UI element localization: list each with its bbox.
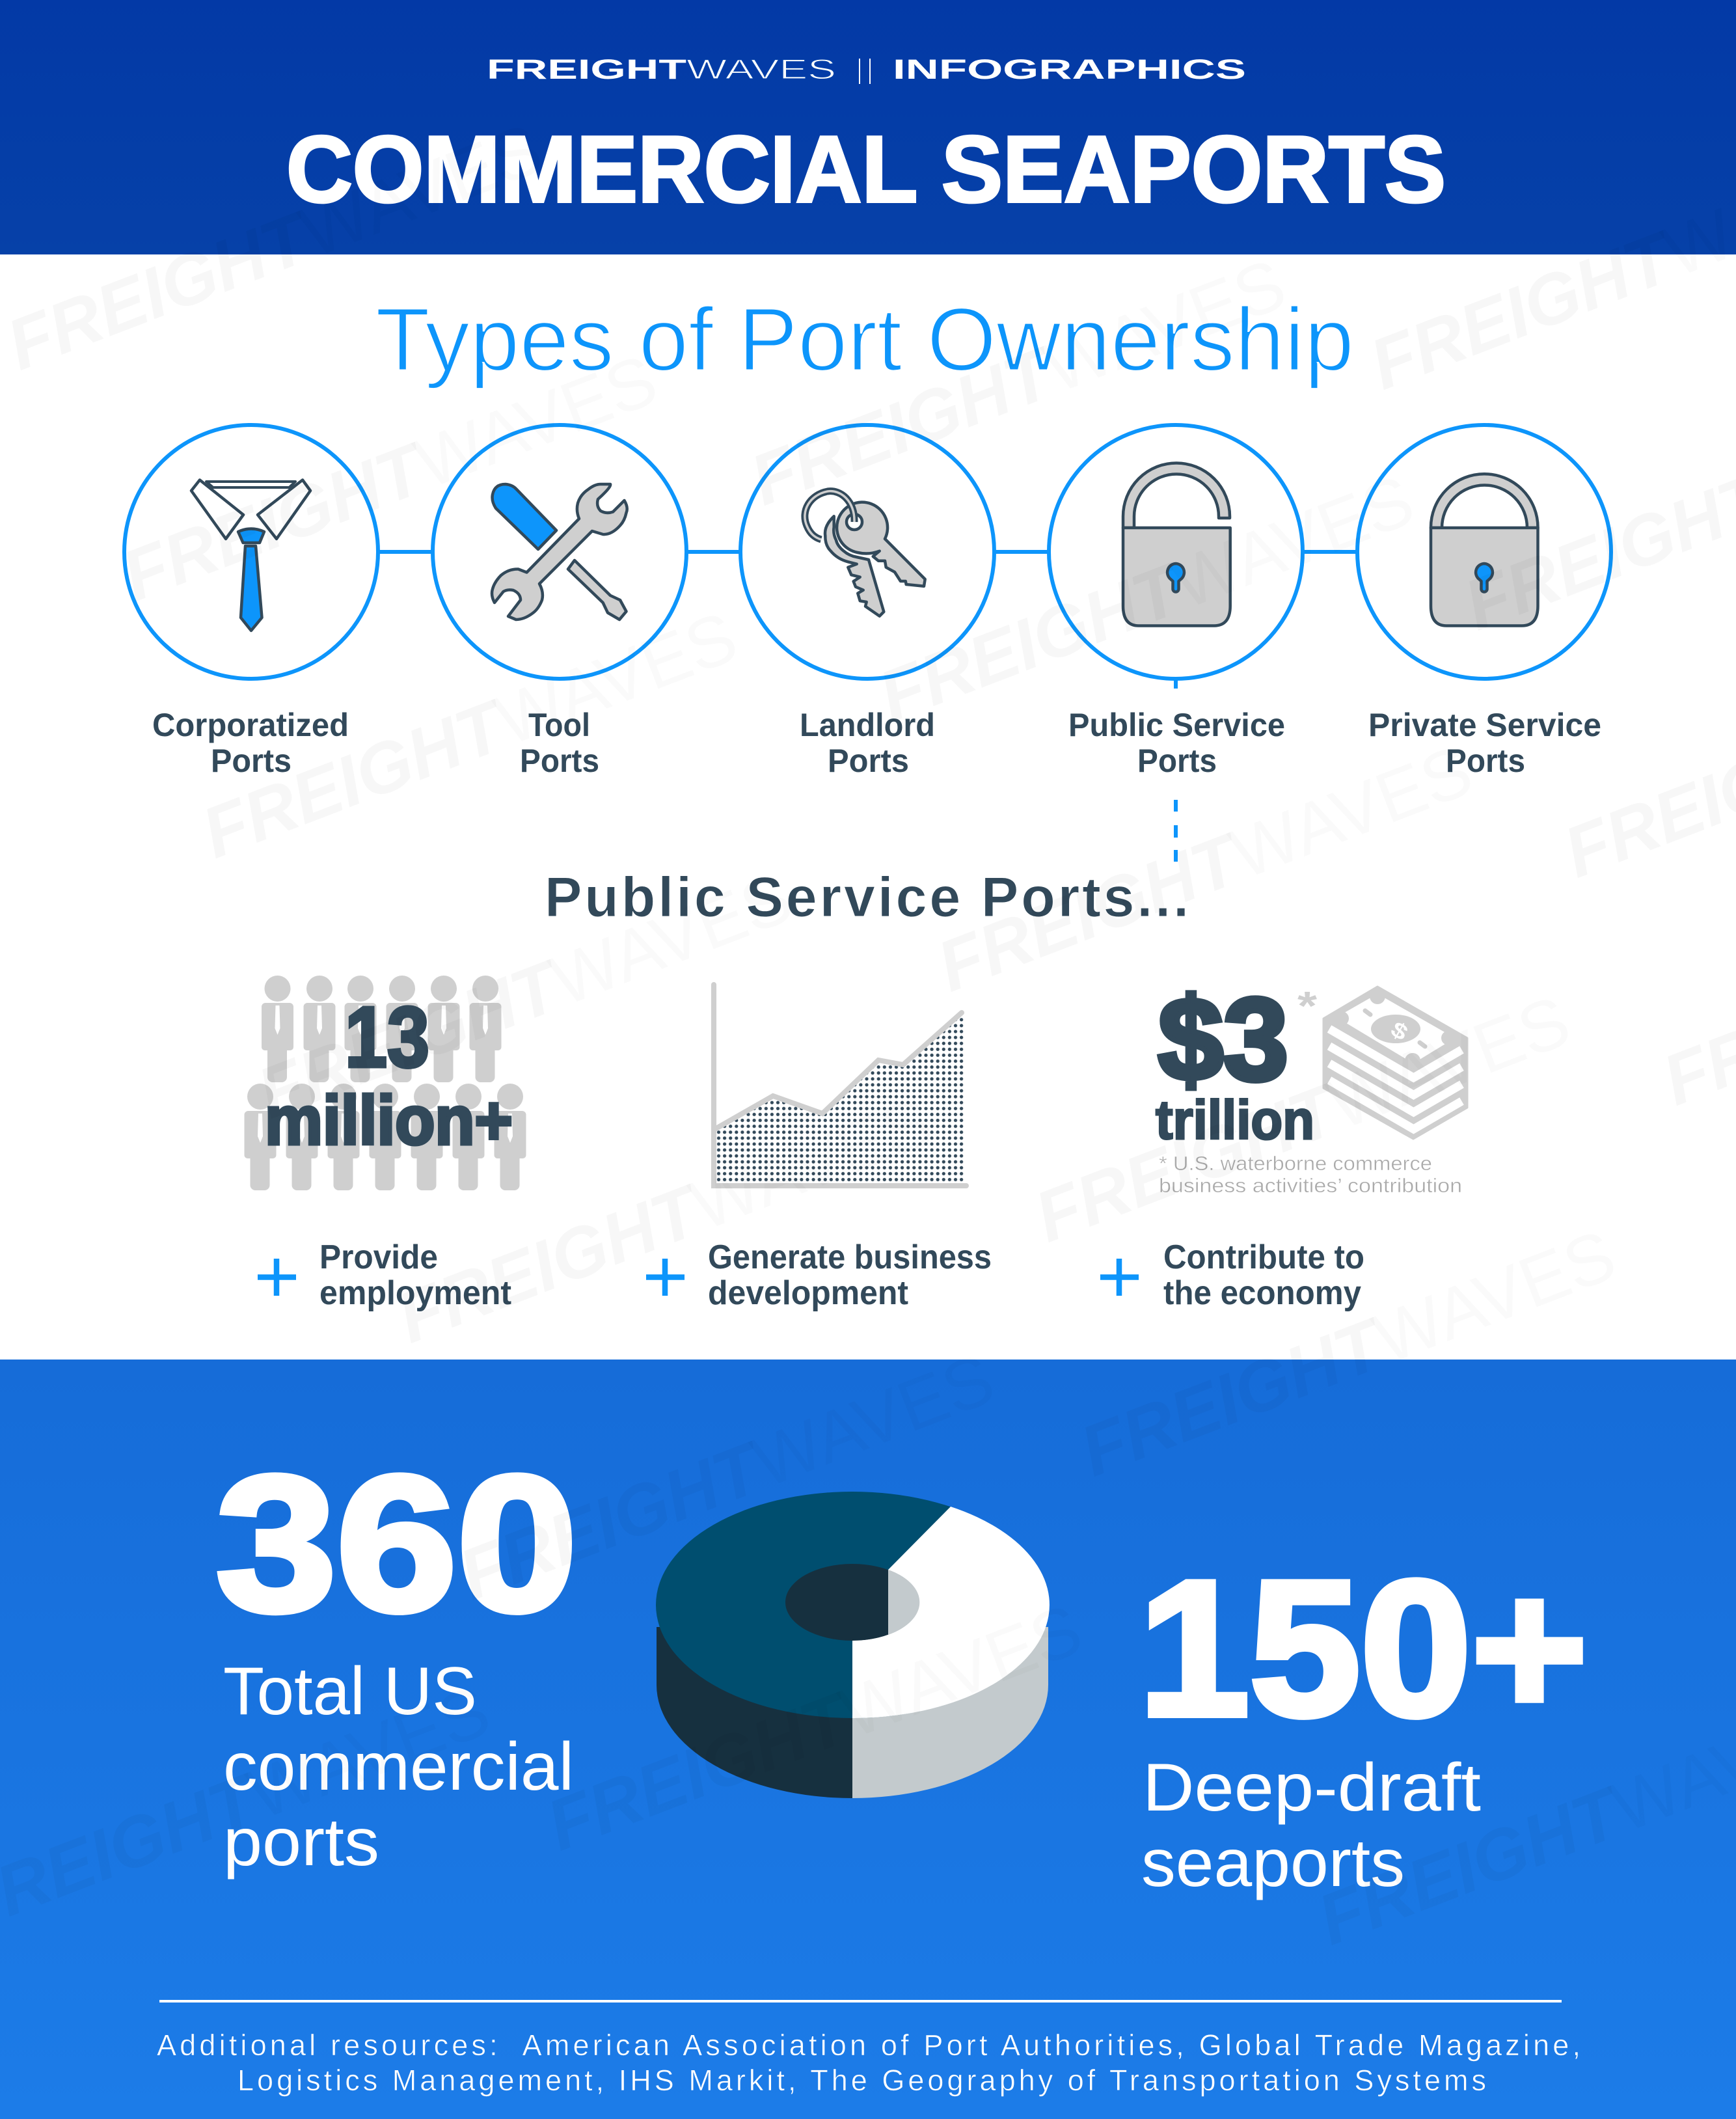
stat: 13 million+ (265, 989, 513, 1159)
icon: plus (258, 1259, 296, 1296)
chart: 3D donut (656, 1492, 1050, 1798)
footnote (1159, 1152, 1462, 1197)
panel: corporatized ports (124, 425, 378, 779)
text: contribute to the economy (1163, 1238, 1364, 1312)
panel: economy contribution (1100, 974, 1467, 1312)
label: tool ports (520, 707, 599, 779)
text: FREIGHTWAVES (449, 1339, 1005, 1615)
icon: plus (1100, 1259, 1139, 1296)
label: private service ports: Ports (1446, 743, 1525, 779)
text: generate business development: development (708, 1274, 908, 1312)
text: FREIGHTWAVES (1070, 1215, 1626, 1492)
text: deep-draft seaports: seaports (1141, 1825, 1405, 1901)
footnote: business activities’ contribution (1159, 1174, 1462, 1197)
text: deep-draft seaports (1141, 1750, 1481, 1901)
asterisk: * (1297, 984, 1318, 1029)
text: provide employment: Provide (319, 1238, 438, 1276)
label: landlord ports: Ports (828, 743, 909, 779)
label: public service ports: Public Service (1068, 707, 1285, 743)
label: corporatized ports (152, 707, 349, 779)
stat: 13 million+: 13 (345, 989, 429, 1085)
panel: tool ports (433, 425, 686, 779)
icon: crowd of people (245, 976, 526, 1190)
text: additional resources: Logistics Management, IHS Markit, The Geography of Transportation Systems (237, 2064, 1486, 2097)
text: deep-draft seaports: Deep-draft (1143, 1750, 1481, 1825)
label: corporatized ports: Corporatized (152, 707, 349, 743)
panel: header band (0, 0, 1736, 254)
heading: types of port ownership: Types of Port Ownership (375, 290, 1354, 390)
text: additional resources (157, 2029, 1580, 2097)
label: tool ports: Tool (528, 707, 590, 743)
text: additional resources: Additional resources: American Association of Port Authorities, Global Trade Magazine, (157, 2029, 1580, 2062)
label: tool ports: Ports (520, 743, 599, 779)
text: FREIGHTWAVES (869, 460, 1424, 737)
label: landlord ports (800, 707, 935, 779)
text: total US commercial ports: Total US (223, 1654, 477, 1729)
footnote: * U.S. waterborne commerce (1159, 1152, 1432, 1175)
label: public service ports (1068, 707, 1285, 779)
header kicker: FreightWaves Infographics: INFOGRAPHICS (893, 54, 1246, 85)
icon: stack of money (1323, 987, 1467, 1139)
icon: plus (646, 1259, 685, 1296)
title: COMMERCIAL SEAPORTS (286, 116, 1446, 222)
panel: business development (646, 985, 992, 1312)
icon: open padlock (1123, 463, 1230, 626)
text: provide employment: employment (319, 1274, 511, 1312)
connectors between circles (377, 550, 1358, 862)
label: landlord ports: Landlord (800, 707, 935, 743)
text: FREIGHTWAVES (247, 857, 803, 1134)
icon: closed padlock (1431, 474, 1538, 626)
heading: public service ports: Public Service Ports... (545, 866, 1189, 929)
label: public service ports: Ports (1137, 743, 1217, 779)
header kicker: FreightWaves Infographics: WAVES (686, 54, 836, 85)
stat: $3 trillion (1156, 974, 1314, 1151)
icon: stack of money: $ (1387, 1017, 1412, 1046)
icon: wrench and screwdriver (492, 484, 627, 620)
text: provide employment (319, 1238, 511, 1312)
stat: 360: 360 (216, 1436, 577, 1651)
label: private service ports (1368, 707, 1601, 779)
panel: employment stat (245, 976, 526, 1312)
header kicker: FreightWaves Infographics (487, 54, 1246, 85)
label: corporatized ports: Ports (211, 743, 292, 779)
label: private service ports: Private Service (1368, 707, 1601, 743)
divider line (159, 2000, 1562, 2003)
panel: landlord ports (740, 425, 994, 779)
text: total US commercial ports (223, 1654, 574, 1880)
text: FREIGHTWAVES (537, 1589, 1092, 1866)
text: FREIGHTWAVES (192, 597, 748, 873)
text: contribute to the economy: the economy (1163, 1274, 1361, 1312)
text: total US commercial ports: ports (223, 1805, 379, 1880)
panel: blue statistics section (0, 1360, 1736, 2119)
text: generate business development (708, 1238, 992, 1312)
text: FREIGHTWAVES (740, 244, 1296, 521)
text: FREIGHTWAVES (1025, 981, 1580, 1257)
text: FREIGHTWAVES (0, 109, 552, 385)
icon: keys (805, 491, 925, 616)
text: FREIGHTWAVES (112, 340, 668, 616)
text: total US commercial ports: commercial (223, 1729, 574, 1805)
text: generate business development: Generate business (708, 1238, 992, 1276)
stat: 150+: 150+ (1139, 1540, 1588, 1756)
panel: public service ports (1049, 425, 1303, 779)
chart: rising area with dots (714, 985, 966, 1186)
stat: 13 million+: million+ (265, 1082, 513, 1159)
header kicker: FreightWaves Infographics: FREIGHT (487, 54, 686, 85)
text: contribute to the economy: Contribute to (1163, 1238, 1364, 1276)
icon: collar and tie (191, 480, 310, 631)
text: FREIGHTWAVES (387, 1082, 943, 1358)
stat: $3 trillion: trillion (1156, 1089, 1314, 1151)
text: FREIGHTWAVES (927, 730, 1483, 1007)
stat: $3 trillion: $3 (1158, 974, 1288, 1105)
panel: private service ports (1357, 425, 1611, 779)
